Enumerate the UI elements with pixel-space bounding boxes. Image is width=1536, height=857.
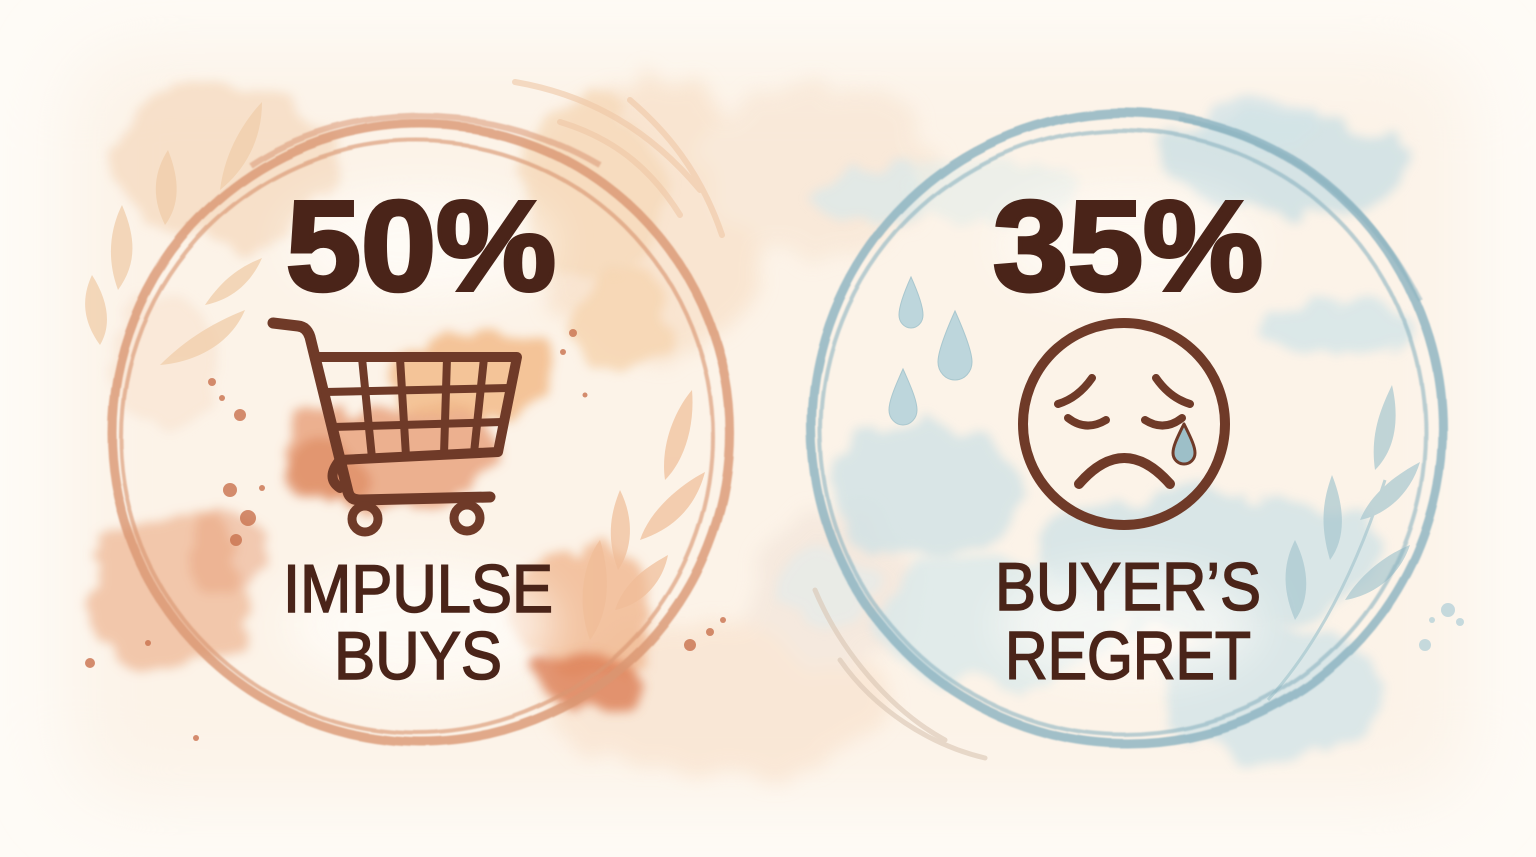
background wash: centre peach xyxy=(530,80,935,780)
white glow behind labels xyxy=(998,190,1258,680)
watercolour washes: blue xyxy=(775,95,1410,755)
watercolour washes: orange xyxy=(85,85,675,675)
panel: buyer's regret watercolour xyxy=(775,95,1464,758)
white glow behind labels xyxy=(285,190,555,685)
stat: 50%: 50% xyxy=(286,175,556,318)
icon: shopping cart xyxy=(273,323,517,532)
label: buyer's regret: REGRET xyxy=(1005,618,1251,694)
circle ring: blue xyxy=(812,113,1442,743)
label: impulse buys: BUYS xyxy=(334,618,502,694)
stat: 35%: 35% xyxy=(993,175,1263,318)
watercolour wash: behind cart xyxy=(285,330,645,708)
leaves: lower right xyxy=(1268,385,1420,700)
leaves: upper left xyxy=(85,102,262,365)
icon: rain drops xyxy=(889,277,972,425)
brush strokes: upper right xyxy=(515,82,722,235)
circle ring: orange xyxy=(112,116,730,742)
label: buyer's regret: BUYER’S xyxy=(995,549,1261,625)
leaves: lower right xyxy=(583,390,705,640)
label: impulse buys xyxy=(283,551,553,694)
paint splatter xyxy=(85,329,726,741)
panel: impulse buys watercolour xyxy=(85,82,730,742)
brush strokes: lower left xyxy=(815,590,985,758)
icon: sad face xyxy=(1023,323,1225,525)
label: impulse buys: IMPULSE xyxy=(283,551,553,627)
label: buyer's regret xyxy=(995,549,1261,694)
paint splatter: blue xyxy=(1419,603,1464,651)
